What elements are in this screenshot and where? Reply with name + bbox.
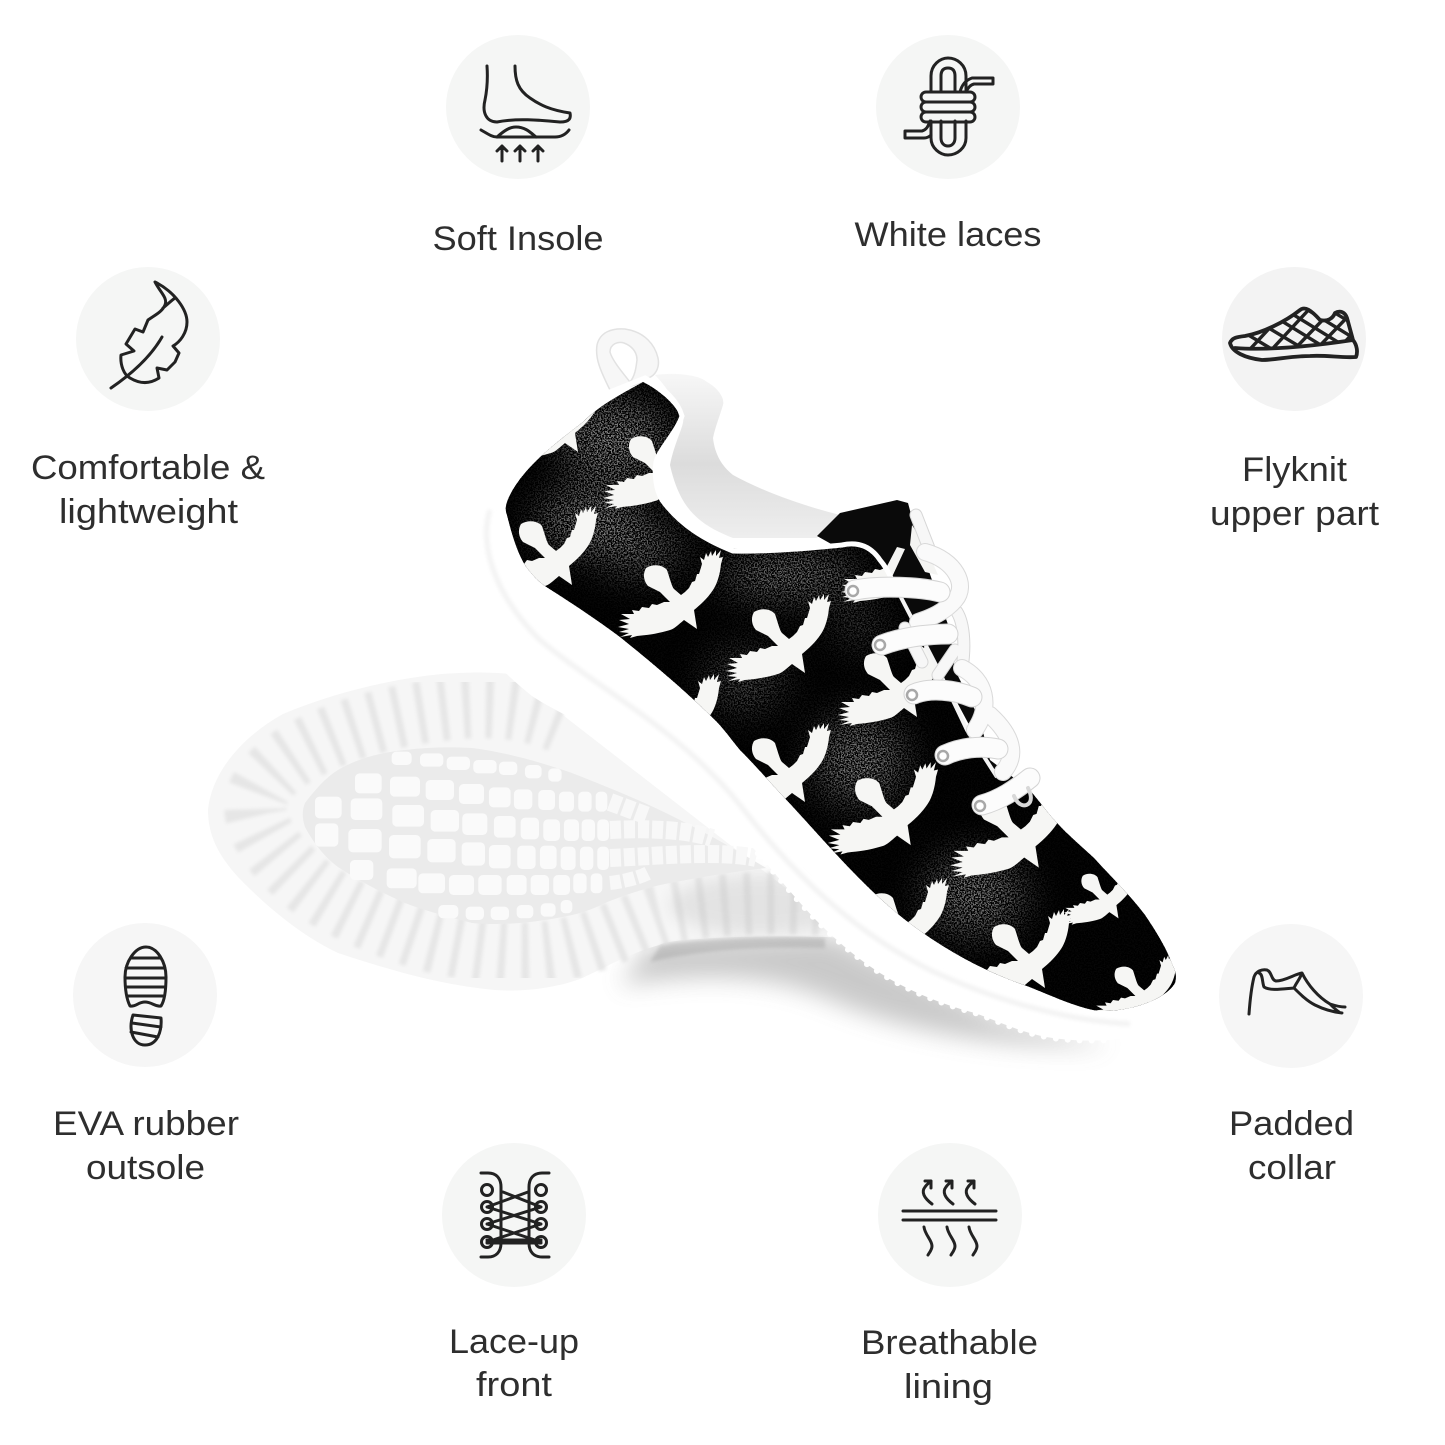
feature: soft insole xyxy=(432,35,604,258)
label: Comfortable & xyxy=(31,449,265,487)
label xyxy=(449,1323,579,1404)
feature: EVA rubber outsole xyxy=(53,923,239,1187)
lace eyelets xyxy=(848,586,985,811)
label: collar xyxy=(1248,1149,1336,1187)
forefoot tread rows xyxy=(610,802,756,883)
midsole ridge shading xyxy=(487,510,1130,1024)
icon: feather xyxy=(76,267,220,411)
label: EVA rubber xyxy=(53,1105,239,1143)
label: White laces xyxy=(854,216,1042,254)
label: front xyxy=(476,1366,553,1404)
tongue xyxy=(817,500,1030,790)
label: Lace-up xyxy=(449,1323,579,1361)
bird print xyxy=(493,373,1178,1025)
label: upper part xyxy=(1210,495,1380,533)
icon: lace knot xyxy=(876,35,1020,179)
ground shadow xyxy=(620,935,1110,1046)
midsole scalloped lower edge xyxy=(679,780,1110,1041)
white midsole of standing shoe xyxy=(446,482,1177,1041)
label xyxy=(1229,1105,1354,1187)
shoe sole, bottom view xyxy=(208,672,850,991)
sole side ribs xyxy=(255,707,830,953)
icon: crossed laces xyxy=(442,1143,586,1287)
label: Padded xyxy=(1229,1105,1354,1143)
label: Soft Insole xyxy=(432,220,604,258)
icon: foot on insole xyxy=(446,35,590,179)
icon: airflow through fabric xyxy=(878,1143,1022,1287)
feature: flyknit upper xyxy=(1210,267,1380,533)
label: Flyknit xyxy=(1242,451,1348,489)
label: Breathable xyxy=(861,1324,1038,1362)
label xyxy=(31,449,265,531)
sole shadow near arch edge xyxy=(650,937,825,962)
feature: white laces xyxy=(854,35,1042,254)
tread area xyxy=(303,747,766,924)
label xyxy=(53,1105,239,1187)
shaded arch of sole xyxy=(670,875,850,935)
icon: collar profile xyxy=(1219,924,1363,1068)
eyestay edge xyxy=(892,580,997,777)
collar trim xyxy=(610,378,892,580)
black fabric upper with bird print xyxy=(490,370,1190,1025)
icon: knit sneaker xyxy=(1220,267,1380,411)
shoe photo xyxy=(208,329,1190,1046)
heel pull tab xyxy=(597,329,658,390)
label xyxy=(1210,451,1380,533)
label: outsole xyxy=(86,1149,205,1187)
feature: breathable lining xyxy=(861,1143,1038,1406)
laces xyxy=(855,515,1031,805)
tread blocks xyxy=(315,752,609,920)
fabric sheen xyxy=(535,400,1025,935)
feature: lace-up front xyxy=(442,1143,586,1404)
label xyxy=(861,1324,1038,1406)
tongue feather accents xyxy=(885,525,938,577)
label: lining xyxy=(904,1368,993,1406)
feature: comfortable and lightweight xyxy=(31,267,265,531)
collar lining xyxy=(655,374,840,538)
icon: shoe print xyxy=(73,923,217,1067)
label: lightweight xyxy=(59,493,239,531)
feature: padded collar xyxy=(1219,924,1363,1187)
